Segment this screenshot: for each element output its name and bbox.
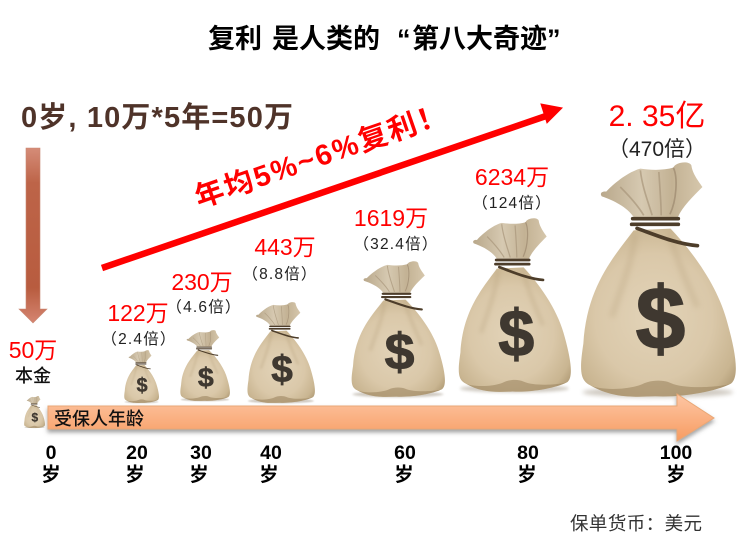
growth rate label: 年均5%~6%复利！ <box>191 97 453 215</box>
title: 是人类的 <box>272 24 380 54</box>
arrow: principal down arrow <box>19 148 47 323</box>
age labels: 30 <box>190 442 212 464</box>
value label: 50万 principal: 本金 <box>15 366 51 386</box>
bag: age 60: $ <box>385 324 414 381</box>
value label: 6234万: 6234万 <box>475 164 549 190</box>
age labels: 60 <box>394 442 416 464</box>
bag: age 0: $ <box>32 410 38 424</box>
age labels: 岁 <box>125 464 145 486</box>
value label: 2.35亿 <box>608 100 706 161</box>
age labels: 20 <box>126 442 148 464</box>
title: 复利 <box>208 24 262 54</box>
bag: age 40: $ <box>271 349 293 391</box>
value label: 2.35亿: 2. 35亿 <box>609 100 705 133</box>
bag: age 80: $ <box>498 297 534 370</box>
age labels: 岁 <box>394 464 414 486</box>
age labels: 岁 <box>517 464 537 486</box>
value label: 1619万: 1619万 <box>354 205 428 231</box>
value label: 6234万 <box>472 164 552 212</box>
value label: 50万 principal: 50万 <box>9 337 57 363</box>
age labels: 岁 <box>189 464 209 486</box>
title: ” <box>547 24 560 54</box>
value label: 2.35亿: （470倍） <box>608 138 706 161</box>
bag: age 30 <box>180 330 230 401</box>
age labels: 岁 <box>666 464 686 486</box>
formula heading: 0岁, 10万*5年=50万 <box>21 101 293 134</box>
timeline arrow <box>48 394 714 441</box>
value label: 1619万: （32.4倍） <box>353 235 439 253</box>
value label: 230万 <box>166 269 242 316</box>
age labels: 0 <box>46 442 57 464</box>
age labels: 岁 <box>259 464 279 486</box>
bag: age 80 <box>459 218 571 392</box>
value label: 1619万 <box>353 205 439 253</box>
value label: 443万: 443万 <box>254 234 316 260</box>
age labels: 100 <box>660 442 692 464</box>
bag: age 0 <box>24 396 45 428</box>
age labels <box>41 442 692 486</box>
bag: age 20 <box>124 350 159 403</box>
age labels: 80 <box>517 442 539 464</box>
arrow: growth trend <box>102 104 562 268</box>
timeline label: 受保人年龄 <box>54 409 144 429</box>
value label: 443万: （8.8倍） <box>242 265 318 283</box>
value label: 122万 <box>101 300 177 348</box>
value label: 230万: 230万 <box>171 269 233 295</box>
bag: age 20: $ <box>137 375 148 397</box>
value label: 6234万: （124倍） <box>472 194 552 212</box>
currency note: 保单货币：美元 <box>570 513 702 534</box>
age labels: 岁 <box>41 464 61 486</box>
bag: age 30: $ <box>198 362 214 392</box>
age labels: 40 <box>260 442 282 464</box>
bag: age 60 <box>352 261 445 397</box>
value label: 230万: （4.6倍） <box>166 298 242 316</box>
value label: 50万 principal <box>9 337 57 386</box>
value label: 122万: 122万 <box>107 300 169 326</box>
title: “ <box>397 24 410 54</box>
bag: age 100: $ <box>636 269 685 368</box>
bag: age 100 <box>581 162 736 398</box>
value label: 443万 <box>242 234 318 283</box>
bag: age 40 <box>247 302 315 403</box>
value label: 122万: （2.4倍） <box>101 330 177 348</box>
title: 第八大奇迹 <box>412 24 547 54</box>
